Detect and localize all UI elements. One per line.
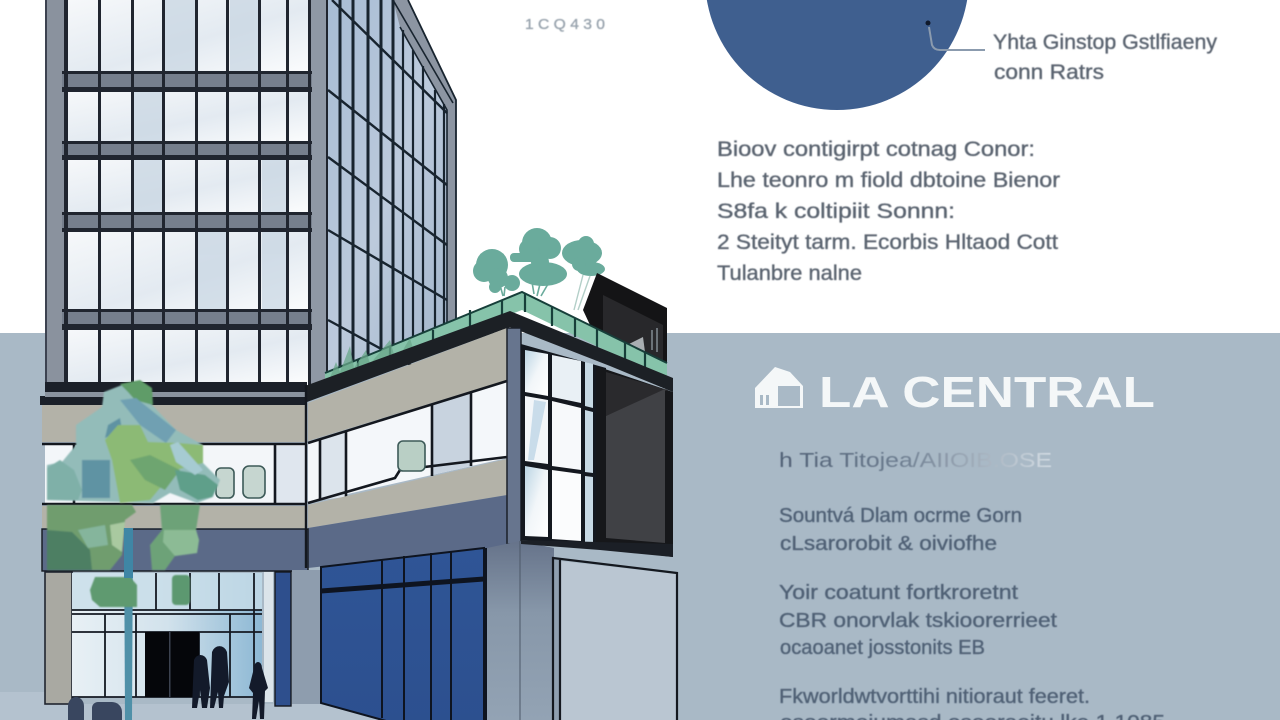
ground-level pavement xyxy=(0,692,484,720)
text block two: ocaoanet josstonits EB xyxy=(780,636,985,659)
text block two: CBR onorvlak tskioorerrieet xyxy=(779,609,1057,632)
rooftop green railing xyxy=(325,292,667,385)
planters in podium window xyxy=(216,466,265,498)
foreground figures at bottom left xyxy=(68,697,122,720)
description paragraph: 2 Steityt tarm. Ecorbis Hltaod Cott xyxy=(717,231,1058,254)
light teal crown xyxy=(47,385,220,503)
rooftop trees xyxy=(473,228,605,310)
overhang underside beam xyxy=(521,540,673,557)
tree three xyxy=(562,236,605,310)
door xyxy=(145,632,199,697)
ground-floor left pier xyxy=(45,572,72,704)
podium lower beige band xyxy=(42,506,306,528)
corner pier xyxy=(487,541,554,720)
background: blue-grey lower band xyxy=(0,333,1280,720)
text block three xyxy=(779,685,1165,720)
rooftop black block xyxy=(583,273,667,375)
dark blue window patch xyxy=(82,460,110,498)
wing window strip xyxy=(308,381,507,503)
tower front facade xyxy=(45,0,328,385)
text block one: cLsarorobit & oiviofhe xyxy=(780,532,997,555)
background: white upper area xyxy=(0,0,1280,333)
top small label: 1 C Q 4 3 0 xyxy=(525,16,605,33)
blue shopfront xyxy=(321,548,487,720)
wing navy band xyxy=(308,495,507,568)
trunk over canopy xyxy=(124,528,133,578)
grey column xyxy=(292,570,320,704)
text block two xyxy=(779,581,1057,659)
illustration: building xyxy=(0,0,677,720)
people silhouettes xyxy=(192,646,268,719)
podium dark bands xyxy=(40,382,307,405)
tree trunk xyxy=(124,528,133,720)
wing roof slab xyxy=(305,311,673,402)
podium beige band xyxy=(42,405,305,442)
planter in wing window xyxy=(398,441,425,471)
green crown top xyxy=(120,380,153,405)
text block one: Sountvá Dlam ocrme Gorn xyxy=(779,504,1022,527)
description paragraph: Lhe teonro m fiold dbtoine Bienor xyxy=(717,169,1060,192)
wing upper beige panel xyxy=(308,328,507,441)
corner column xyxy=(507,328,521,544)
blue crown patches xyxy=(120,398,176,443)
wing lower beige band xyxy=(308,459,507,528)
lower clumps in glazing xyxy=(90,577,137,607)
entrance glazing xyxy=(72,570,320,706)
description paragraph xyxy=(717,138,1060,285)
text block one xyxy=(779,504,1022,555)
dark recessed panel xyxy=(596,366,673,557)
tree one xyxy=(473,249,520,296)
title: LA CENTRAL xyxy=(819,368,1155,417)
tree two xyxy=(510,228,567,296)
description paragraph: S8fa k coltipiit Sonnn: xyxy=(717,200,955,223)
pale retail panel xyxy=(553,558,677,720)
blue circle xyxy=(705,0,969,110)
text block two: Yoir coatunt fortkroretnt xyxy=(779,581,1018,604)
green lower band xyxy=(47,505,136,570)
bright green mid xyxy=(105,425,203,503)
callout text xyxy=(993,31,1217,84)
street tree xyxy=(47,380,220,720)
description paragraph: Bioov contigirpt cotnag Conor: xyxy=(717,138,1035,161)
podium window strip xyxy=(42,444,306,504)
callout leader line xyxy=(926,20,985,50)
icon: house xyxy=(755,367,803,408)
corner windows xyxy=(521,344,606,546)
left branches xyxy=(47,460,82,500)
tree canopy xyxy=(47,380,220,607)
description paragraph: Tulanbre nalne xyxy=(717,262,862,285)
podium grey strip xyxy=(45,392,307,397)
side blue panel xyxy=(264,572,273,702)
callout text: conn Ratrs xyxy=(994,61,1104,84)
subtitle fading: h Tia Titojea/AIIOIB.OSE xyxy=(779,450,1052,472)
right lobe on navy band xyxy=(150,505,200,570)
podium navy band xyxy=(42,529,308,571)
callout text: Yhta Ginstop Gstlfiaeny xyxy=(993,31,1217,54)
text block three: Fkworldwtvorttihi nitioraut feeret. xyxy=(779,685,1090,708)
tower side facade xyxy=(328,0,456,372)
